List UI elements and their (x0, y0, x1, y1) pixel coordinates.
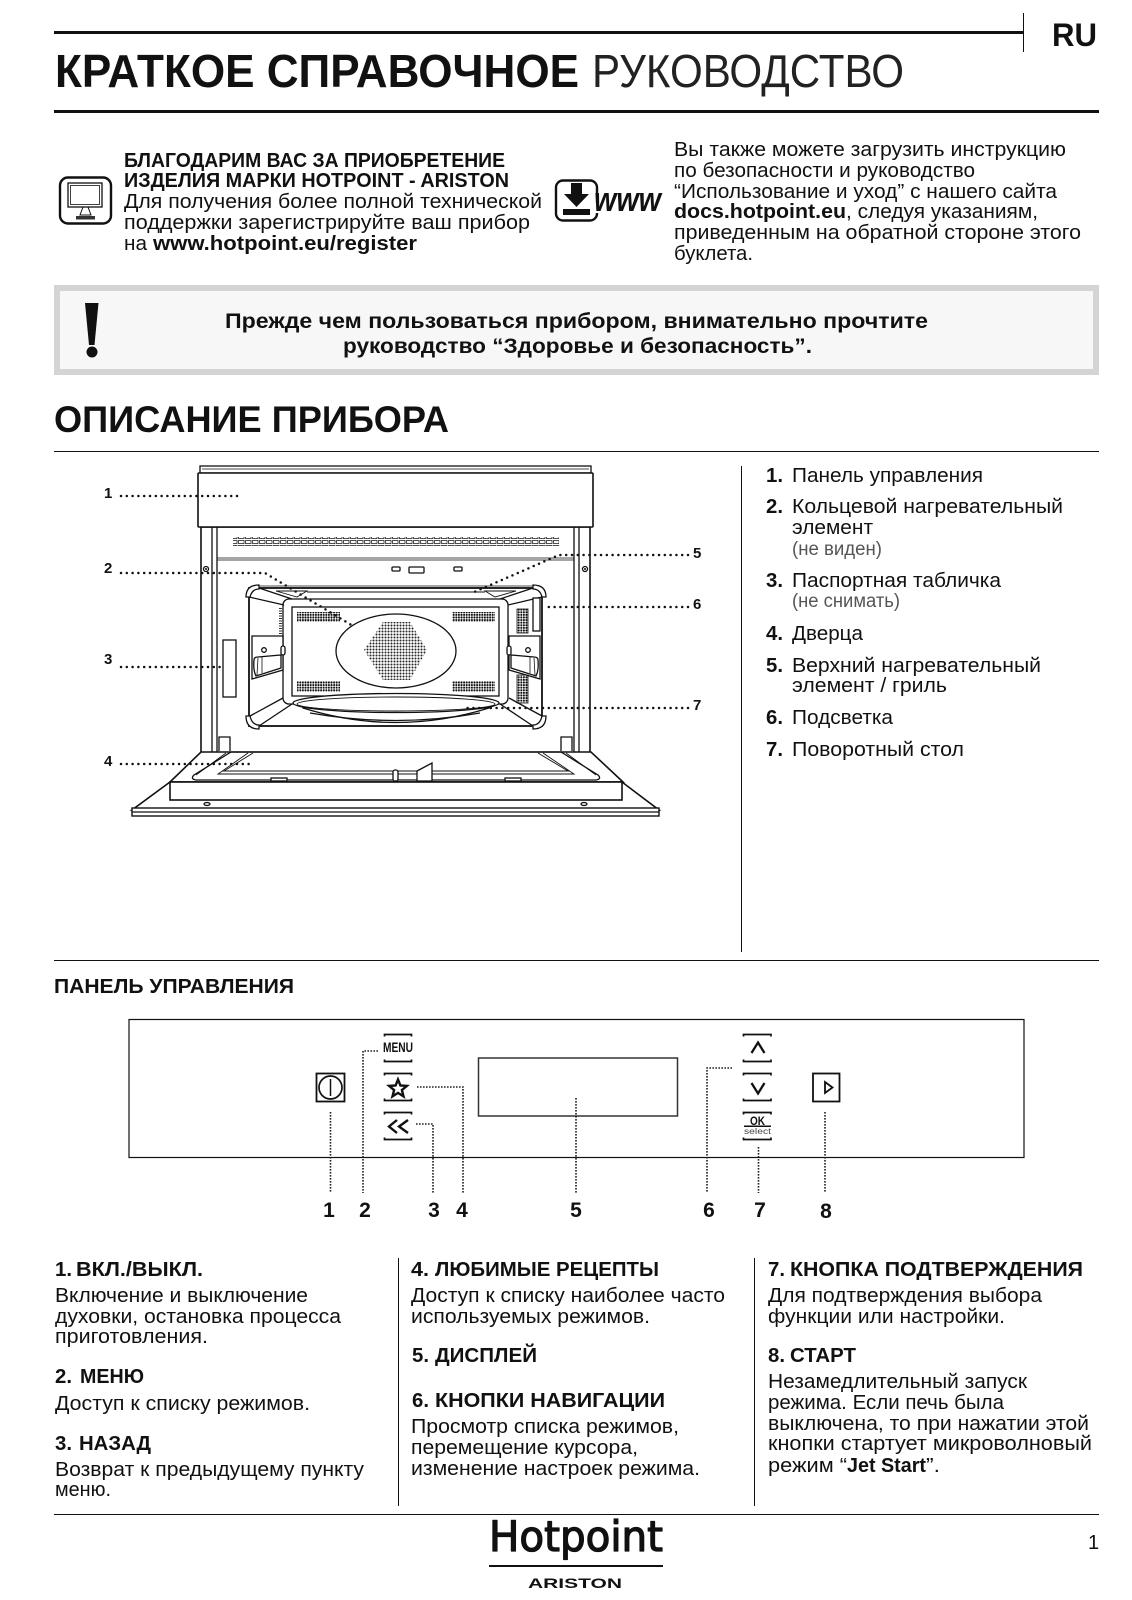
icon: download www: www (594, 181, 663, 219)
icon: download www (556, 180, 663, 220)
function 1: 1. (55, 1259, 72, 1281)
function 8: режима. Если печь была (768, 1392, 1005, 1414)
control panel diagram (129, 1020, 1024, 1223)
function 4: Доступ к списку наиболее часто (411, 1285, 725, 1307)
control numbers: 3 (428, 1199, 440, 1222)
parts legend: 6. (766, 707, 783, 729)
function 3: Возврат к предыдущему пункту (55, 1459, 364, 1481)
function 4 (411, 1259, 725, 1328)
function 2 (55, 1366, 310, 1415)
button: ok select (744, 1112, 772, 1140)
parts legend: (не виден) (792, 539, 882, 560)
column: functions 7-8 (768, 1259, 1092, 1477)
button: menu: MENU (383, 1040, 413, 1055)
parts legend: 7. (766, 739, 783, 761)
control numbers: 1 (323, 1199, 335, 1222)
control leader 4 (417, 1087, 463, 1193)
button: start (813, 1074, 840, 1102)
download text: буклета. (674, 243, 753, 265)
parts legend: Панель управления (792, 465, 983, 487)
function 3: меню. (55, 1479, 111, 1501)
button: ok select: OK (750, 1114, 765, 1128)
function 2: Доступ к списку режимов. (55, 1393, 310, 1415)
title: КРАТКОЕ СПРАВОЧНОЕ (55, 45, 579, 97)
parts legend: Подсветка (792, 707, 894, 729)
title: РУКОВОДСТВО (592, 45, 904, 97)
function 1: духовки, остановка процесса (55, 1306, 342, 1328)
function 4: ЛЮБИМЫЕ РЕЦЕПТЫ (435, 1259, 659, 1281)
function 1 (55, 1259, 342, 1348)
parts legend: Дверца (792, 623, 864, 645)
panel: safety warning (57, 288, 1096, 372)
download text: “Использование и уход” с нашего сайта (674, 181, 1058, 203)
function 1: приготовления. (55, 1326, 208, 1348)
parts legend: Паспортная табличка (792, 570, 1002, 592)
button: back (384, 1112, 412, 1140)
function 8: СТАРТ (790, 1345, 856, 1367)
registration text: БЛАГОДАРИМ ВАС ЗА ПРИОБРЕТЕНИЕ (124, 150, 505, 172)
function 6: КНОПКИ НАВИГАЦИИ (435, 1390, 665, 1412)
download text: , следуя указаниям, (846, 201, 1038, 223)
language code: RU (1052, 17, 1097, 53)
parts legend: 3. (766, 570, 783, 592)
function 3: 3. (55, 1433, 72, 1455)
control numbers: 4 (456, 1199, 468, 1222)
function 7: КНОПКА ПОДТВЕРЖДЕНИЯ (790, 1259, 1083, 1281)
logo: Hotpoint Ariston (489, 1512, 663, 1591)
function 8 (768, 1345, 1092, 1477)
function 5: ДИСПЛЕЙ (435, 1343, 537, 1367)
function 1: ВКЛ./ВЫКЛ. (76, 1259, 203, 1281)
rating plate (223, 640, 236, 697)
leader 1 (104, 485, 241, 502)
button: down (744, 1074, 771, 1100)
function 6 (411, 1390, 700, 1480)
control leader 2 (363, 1051, 378, 1193)
control numbers: 5 (570, 1199, 582, 1222)
leader 5: 5 (693, 545, 701, 562)
control leader 8 (824, 1112, 826, 1193)
function 8: Незамедлительный запуск (768, 1371, 1027, 1393)
icon: exclamation mark (85, 303, 98, 358)
function 2: 2. (55, 1366, 72, 1388)
leader 3 (104, 651, 222, 668)
logo: Hotpoint Ariston: ARISTON (528, 1575, 622, 1591)
leader 4: 4 (104, 753, 113, 770)
function 8: выключена, то при нажатии этой (768, 1413, 1089, 1435)
left rack bracket (252, 636, 285, 679)
function 7: функции или настройки. (768, 1306, 1005, 1328)
function 4: используемых режимов. (411, 1306, 650, 1328)
leader 5 (472, 545, 701, 593)
control leader 7 (758, 1147, 760, 1193)
icon: computer monitor (60, 178, 111, 224)
parts legend: Кольцевой нагревательный (792, 496, 1063, 518)
control leader 1 (330, 1112, 332, 1193)
download text: docs.hotpoint.eu (674, 201, 846, 223)
leader 7: 7 (693, 697, 701, 714)
function 8: Jet Start (847, 1455, 926, 1477)
top rule with language tab (54, 13, 1024, 52)
right rack bracket (507, 636, 540, 679)
download text: Вы также можете загрузить инструкцию (674, 139, 1066, 161)
function 4: 4. (411, 1259, 429, 1281)
button: up (744, 1034, 771, 1062)
download text: по безопасности и руководство (674, 160, 975, 182)
function 3: НАЗАД (79, 1433, 151, 1455)
function 6: перемещение курсора, (411, 1437, 638, 1459)
function 8: 8. (768, 1345, 785, 1367)
download text: приведенным на обратной стороне этого (674, 222, 1081, 244)
open door (132, 737, 659, 816)
parts legend: 5. (766, 655, 783, 677)
panel: safety warning: руководство “Здоровье и безопасность”. (343, 335, 812, 358)
parts legend: 2. (766, 496, 783, 518)
control numbers: 7 (754, 1199, 766, 1222)
oven diagram (104, 466, 701, 816)
download text (674, 139, 1081, 265)
registration text (124, 150, 542, 255)
light cover and side grids (517, 598, 540, 703)
function 7 (768, 1259, 1083, 1328)
registration text: ИЗДЕЛИЯ МАРКИ HOTPOINT - ARISTON (124, 170, 509, 192)
function 3 (55, 1433, 364, 1501)
control numbers: 6 (703, 1199, 715, 1222)
parts legend: элемент / гриль (792, 675, 947, 697)
control numbers (323, 1199, 832, 1223)
control leader 3 (416, 1124, 433, 1193)
parts legend: 4. (766, 623, 783, 645)
registration text: поддержки зарегистрируйте ваш прибор (124, 212, 530, 234)
function 6: Просмотр списка режимов, (411, 1416, 679, 1438)
parts legend: Поворотный стол (792, 739, 964, 761)
function 7: 7. (768, 1259, 785, 1281)
oven cavity (246, 585, 546, 729)
control numbers: 8 (820, 1200, 832, 1223)
parts legend (766, 465, 1063, 761)
parts legend: (не снимать) (792, 591, 900, 612)
function 5: 5. (412, 1345, 429, 1367)
display window (478, 1058, 678, 1116)
button: ok select: select (744, 1126, 772, 1136)
parts legend: элемент (792, 517, 873, 539)
function 7: Для подтверждения выбора (768, 1285, 1043, 1307)
button: favourites star (384, 1074, 412, 1100)
function 8: ”. (926, 1455, 940, 1477)
page number: 1 (1088, 1532, 1099, 1554)
control leader 5 (575, 1098, 577, 1193)
function 8: кнопки стартует микроволновый (768, 1433, 1092, 1455)
function 6: изменение настроек режима. (411, 1458, 700, 1480)
turntable (293, 694, 499, 722)
registration text: Для получения более полной технической (124, 191, 542, 213)
leader 2 (104, 560, 353, 626)
title (55, 45, 904, 97)
control numbers: 2 (359, 1199, 371, 1222)
function 1: Включение и выключение (55, 1285, 308, 1307)
column: functions 4-6 (411, 1259, 725, 1480)
leader 1: 1 (104, 485, 112, 502)
leader 2: 2 (104, 560, 112, 577)
leader 3: 3 (104, 651, 112, 668)
function 2: МЕНЮ (80, 1366, 144, 1388)
heading: control panel: ПАНЕЛЬ УПРАВЛЕНИЯ (54, 976, 294, 998)
function 8: режим “ (768, 1455, 847, 1477)
control leader 6 (707, 1068, 732, 1193)
icon: power button (316, 1074, 344, 1102)
logo: Hotpoint Ariston: Hotpoint (489, 1512, 663, 1561)
registration text: на (124, 233, 148, 255)
parts legend: Верхний нагревательный (792, 655, 1041, 677)
column: functions 1-3 (55, 1259, 364, 1501)
leader 6: 6 (693, 596, 701, 613)
function 6: 6. (412, 1390, 429, 1412)
panel: safety warning: Прежде чем пользоваться прибором, внимательно прочтите (225, 310, 928, 333)
button: menu (383, 1034, 413, 1062)
registration text: www.hotpoint.eu/register (152, 233, 417, 255)
parts legend: 1. (766, 465, 783, 487)
heading: product description: ОПИСАНИЕ ПРИБОРА (54, 399, 449, 440)
